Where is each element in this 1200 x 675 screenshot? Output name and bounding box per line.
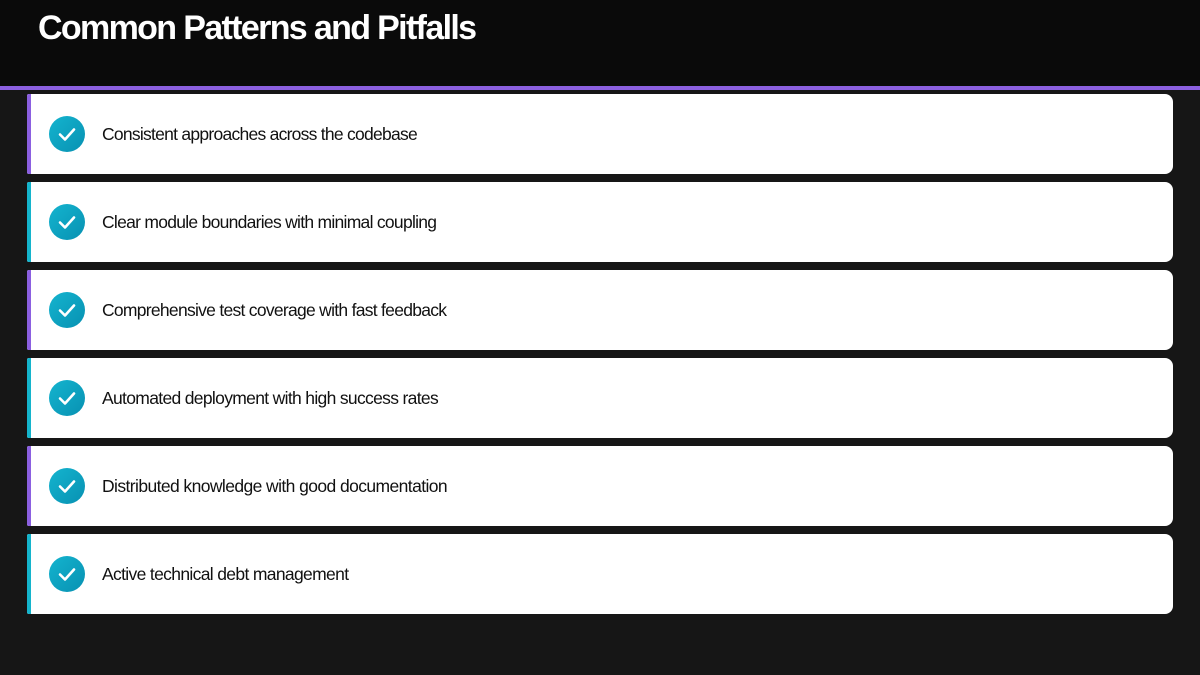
icon: check [49,468,85,504]
card: test coverage [27,270,1173,350]
icon: check [49,556,85,592]
card: module boundaries [27,182,1173,262]
title: Common Patterns and Pitfalls [38,9,475,47]
card: consistent approaches [27,94,1173,174]
item text: Consistent approaches across the codebase [102,124,417,144]
header accent rule [0,86,1200,90]
item text: Distributed knowledge with good documentation [102,476,447,496]
item text: Clear module boundaries with minimal coupling [102,212,436,232]
icon: check [49,292,85,328]
item text: Active technical debt management [102,564,348,584]
card: distributed knowledge [27,446,1173,526]
list of practices [27,94,1173,614]
item text: Comprehensive test coverage with fast feedback [102,300,446,320]
icon: check [49,204,85,240]
header band [0,0,1200,86]
card: automated deployment [27,358,1173,438]
icon: check [49,380,85,416]
card: technical debt [27,534,1173,614]
item text: Automated deployment with high success rates [102,388,438,408]
icon: check [49,116,85,152]
